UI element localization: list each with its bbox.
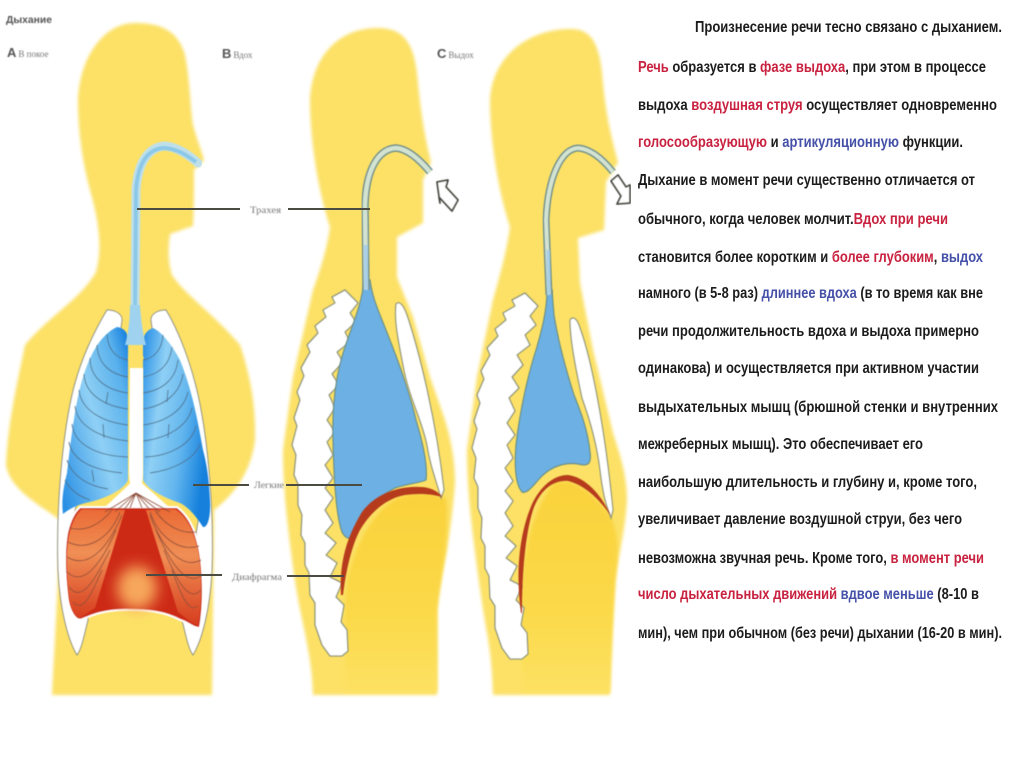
abdomen B: [345, 493, 447, 692]
pointer: trachea A: [137, 208, 240, 210]
rib cage A: [58, 310, 212, 655]
line 12: межреберных мышц). Это обеспечивает его: [638, 436, 923, 453]
line 6: обычного, когда человек молчит.Вдох при речи: [638, 211, 948, 228]
line 16: число дыхательных движений вдвое меньше (8-10 в: [638, 586, 979, 603]
bronchi and trachea A: [125, 146, 198, 367]
figure C: exhale: [467, 29, 630, 695]
body silhouette B: [283, 28, 455, 695]
pointer: lungs B: [286, 484, 362, 486]
arrow: air out: [611, 175, 630, 204]
diagram labels: [6, 14, 474, 582]
figure B: inhale: [283, 28, 458, 695]
label: lungs: Легкие: [254, 480, 284, 490]
line 8: намного (в 5-8 раз) длиннее вдоха (в то время как вне: [638, 285, 983, 302]
diaphragm left wing: [67, 509, 125, 618]
label: diaphragm: Диафрагма: [232, 572, 282, 582]
sternum A: [129, 368, 143, 495]
pointer: diaphragm B: [287, 575, 344, 577]
diaphragm C: [518, 475, 611, 613]
body silhouette A: [6, 23, 255, 695]
line 4: голосообразующую и артикуляционную функции.: [638, 134, 963, 151]
label: A at rest: АВ покое: [7, 45, 48, 60]
label: C exhale: СВыдох: [437, 46, 474, 61]
pointer: lungs A: [193, 484, 249, 486]
pointer: trachea B: [288, 208, 370, 210]
lung C: [515, 290, 590, 492]
text block: speech breathing explanation: [638, 19, 1002, 642]
line 2: Речь образуется в фазе выдоха, при этом в процессе: [638, 59, 986, 76]
diaphragm B: [341, 487, 442, 595]
line 15: невозможна звучная речь. Кроме того, в момент речи: [638, 550, 984, 567]
spine B: [292, 290, 358, 656]
right lung A: [143, 328, 210, 527]
label: title: Дыхание: [6, 14, 52, 26]
lung B: [333, 280, 426, 538]
trachea C: [546, 148, 613, 295]
spine C: [472, 293, 538, 659]
abdomen C: [522, 481, 617, 692]
label: trachea: Трахея: [250, 205, 281, 215]
arrow: air in: [437, 180, 458, 211]
diaphragm A: [65, 493, 203, 628]
left lung A: [62, 327, 128, 514]
diaphragm centre glow: [117, 566, 157, 610]
figure A: breathing at rest: [6, 23, 255, 695]
label: B inhale: ВВдох: [222, 46, 253, 61]
sternum B: [395, 303, 444, 498]
body silhouette C: [467, 29, 627, 695]
diaphragm right wing: [146, 509, 201, 625]
line 7: становится более коротким и более глубоким, выдох: [638, 249, 983, 266]
sternum C: [570, 318, 613, 518]
pointer: diaphragm A: [146, 574, 222, 576]
trachea B: [365, 148, 430, 290]
